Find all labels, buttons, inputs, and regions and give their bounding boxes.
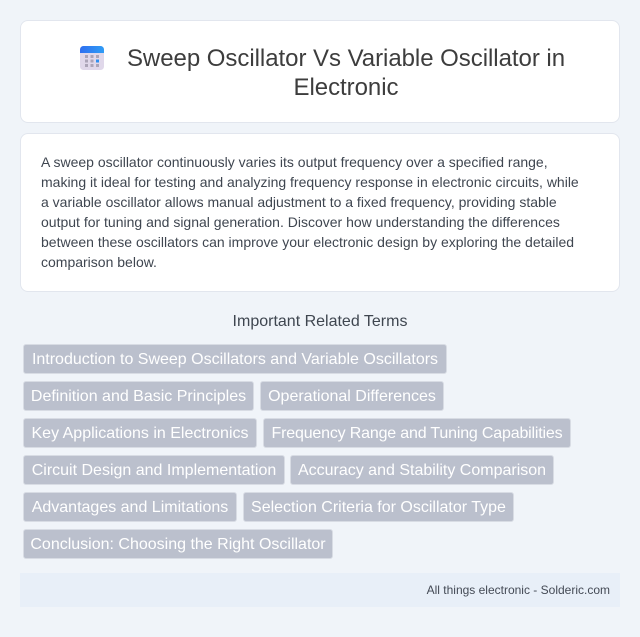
panel: intro text card: [20, 133, 620, 292]
title: Electronic: [294, 74, 398, 101]
text block: intro paragraph: a variable oscillator allows manual adjustment to a fixed frequency, providing stable: [41, 194, 557, 210]
title: Sweep Oscillator Vs Variable Oscillator in: [127, 45, 565, 72]
tag: Selection Criteria for Oscillator Type: [251, 499, 506, 516]
tag: Definition and Basic Principles: [31, 388, 246, 405]
footer: [20, 573, 620, 607]
tag: Introduction to Sweep Oscillators and Variable Oscillators: [32, 351, 438, 368]
tag: [23, 529, 333, 559]
tag: [263, 418, 571, 448]
tag: [23, 455, 285, 485]
tag: Circuit Design and Implementation: [32, 462, 276, 479]
panel: title card: [20, 20, 620, 123]
tag: Accuracy and Stability Comparison: [298, 462, 546, 479]
tag: [23, 381, 254, 411]
icon: calendar grid: [80, 46, 104, 70]
tag: Conclusion: Choosing the Right Oscillator: [30, 536, 326, 553]
tag: [243, 492, 514, 522]
text block: intro paragraph: output for tuning and signal generation. Discover how understanding the differences: [41, 214, 560, 230]
tag: Advantages and Limitations: [32, 499, 228, 516]
tag: Operational Differences: [268, 388, 436, 405]
panel: related term tags: [23, 344, 571, 559]
tag: [23, 344, 447, 374]
text block: intro paragraph: A sweep oscillator continuously varies its output frequency over a specified range,: [41, 154, 548, 170]
tag: Key Applications in Electronics: [32, 425, 248, 442]
text block: intro paragraph: making it ideal for testing and analyzing frequency response in electronic circuits, while: [41, 174, 579, 190]
tag: [23, 492, 237, 522]
text block: intro paragraph: between these oscillators can improve your electronic design by exploring the detailed: [41, 234, 574, 250]
text block: intro paragraph: [41, 154, 579, 270]
text block: intro paragraph: comparison below.: [41, 254, 157, 270]
footer: All things electronic - Solderic.com: [427, 583, 610, 597]
tag: [260, 381, 444, 411]
tag: [290, 455, 554, 485]
tag: [23, 418, 257, 448]
tag: Frequency Range and Tuning Capabilities: [272, 425, 562, 442]
heading: important related terms: Important Related Terms: [233, 313, 407, 330]
title: [127, 45, 565, 101]
